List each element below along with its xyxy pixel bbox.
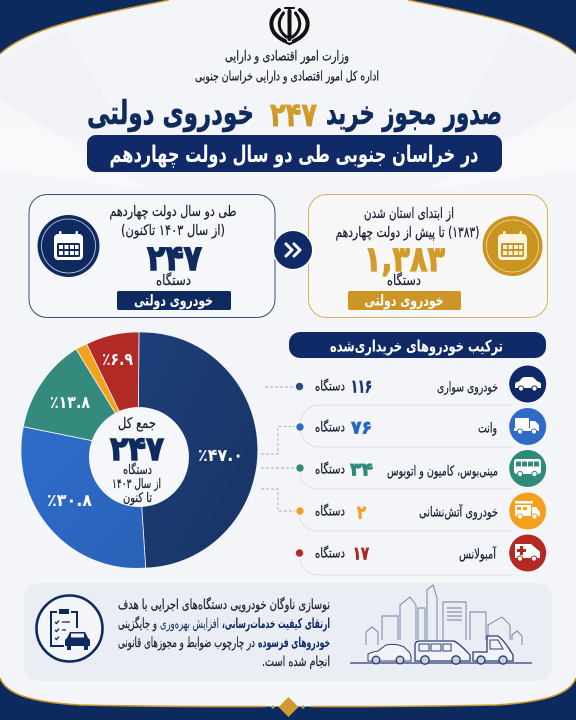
center total: جمع کل xyxy=(118,416,156,432)
number: 247: ۲۴۷ xyxy=(147,239,202,279)
center total xyxy=(89,407,189,507)
text: period description: طی دو سال دولت چهاردهم xyxy=(110,204,236,220)
row: pickups xyxy=(296,408,546,445)
text: period description xyxy=(110,204,236,239)
row outlines xyxy=(300,405,512,575)
row: buses: مینی‌بوس، کامیون و اتوبوس xyxy=(387,464,498,480)
label: government vehicles navy: خودروی دولتی xyxy=(134,292,213,310)
header: top navy corners xyxy=(0,0,576,54)
row: ambulances xyxy=(296,534,546,572)
footer panel xyxy=(24,583,552,681)
icon: gold calendar xyxy=(482,216,542,276)
row: sedans: دستگاه xyxy=(315,378,345,394)
title: ۲۴۷ xyxy=(270,95,317,134)
center total: ۲۴۷ xyxy=(110,429,164,468)
panel: current government card xyxy=(29,194,275,318)
arrow: double chevron badge xyxy=(272,230,314,270)
subtitle banner xyxy=(87,135,502,172)
row: buses: دستگاه xyxy=(315,460,345,478)
panel: previous period card xyxy=(308,194,548,318)
row: fire trucks xyxy=(296,492,546,530)
donut chart xyxy=(21,332,258,568)
label: 30.8 percent: ٪۳۰.۸ xyxy=(47,491,93,511)
row: buses: ۳۴ xyxy=(350,460,373,480)
row: sedans: خودروی سواری xyxy=(437,380,498,396)
title: خودروی دولتی xyxy=(87,93,254,133)
slice: fire trucks xyxy=(76,344,138,450)
title xyxy=(87,93,502,134)
row: ambulances: دستگاه xyxy=(315,544,345,562)
text: unit: دستگاه xyxy=(156,272,191,289)
row: fire trucks: دستگاه xyxy=(315,502,345,520)
footer: navy band with gold line xyxy=(0,678,576,720)
icon: fire truck xyxy=(509,492,546,530)
slice: ambulances 6.9% xyxy=(87,332,139,450)
icon: navy calendar xyxy=(38,215,100,277)
center total: از سال ۱۴۰۳ xyxy=(112,477,161,492)
label: 47.0 percent: ٪۴۷.۰ xyxy=(198,446,243,466)
center total: تا کنون xyxy=(123,491,152,506)
label: 13.8 percent: ٪۱۳.۸ xyxy=(50,393,91,413)
slice: buses 13.8% xyxy=(23,349,138,450)
slice: pickups 30.8% xyxy=(21,427,146,568)
label: government vehicles gold: خودروی دولتی xyxy=(364,292,444,310)
text: description xyxy=(118,596,330,670)
icon: car xyxy=(509,366,546,402)
icon: ambulance xyxy=(509,534,546,572)
row: pickups: دستگاه xyxy=(315,418,345,436)
text: provincial office: اداره کل امور اقتصادی و دارایی خراسان جنوبی xyxy=(195,70,379,84)
number: 1383: ۱,۳۸۳ xyxy=(364,240,445,280)
text: unit: دستگاه xyxy=(387,272,421,289)
row: sedans xyxy=(296,366,546,402)
icon: truck xyxy=(509,408,546,445)
icon: bus xyxy=(509,450,546,487)
row: fire trucks: ۲ xyxy=(357,502,366,524)
heading: vehicle composition: ترکیب خودروهای خریداری‌شده xyxy=(330,336,503,356)
text: period description: (از سال ۱۴۰۳ تاکنون) xyxy=(121,223,225,239)
text: description: خودروهای فرسوده xyxy=(258,635,330,651)
connector lines xyxy=(261,387,295,511)
text: description: در چارچوب ضوابط و مجوزهای قانونی xyxy=(118,635,255,651)
illustration: city and vehicles xyxy=(350,585,532,664)
text: ministry name: وزارت امور اقتصادی و دارایی xyxy=(225,48,349,64)
row: sedans: ۱۱۶ xyxy=(351,376,372,398)
text: description: نوسازی ناوگان خودرویی دستگاه‌های اجرایی با هدف xyxy=(118,596,330,613)
text: description: ارتقای کیفیت خدمات‌رسانی، xyxy=(222,616,330,632)
row: fire trucks: خودروی آتش‌نشانی xyxy=(419,504,498,520)
text: description: افزایش بهره‌وری xyxy=(160,616,219,632)
text: period description: از ابتدای استان شدن xyxy=(364,206,454,222)
icon: national emblem xyxy=(271,8,308,44)
row: pickups: وانت xyxy=(478,420,497,436)
row: ambulances: آمبولانس xyxy=(459,546,497,562)
row: buses xyxy=(296,450,546,487)
heading: vehicle composition xyxy=(289,332,546,358)
text: period description xyxy=(336,206,480,241)
slice: sedans 47.0% xyxy=(138,332,258,568)
row: ambulances: ۱۷ xyxy=(353,544,369,564)
text: period description: (۱۳۸۳) تا پیش از دولت چهاردهم xyxy=(336,225,480,241)
icon: checklist and car xyxy=(36,596,102,662)
text: description: و جایگزینی xyxy=(118,615,157,632)
icon: gold diamond xyxy=(271,697,305,717)
row: pickups: ۷۶ xyxy=(351,418,372,438)
center total: دستگاه xyxy=(123,462,152,478)
label: 6.9 percent: ٪۶.۹ xyxy=(102,350,134,370)
text: description: انجام شده است. xyxy=(262,654,330,670)
